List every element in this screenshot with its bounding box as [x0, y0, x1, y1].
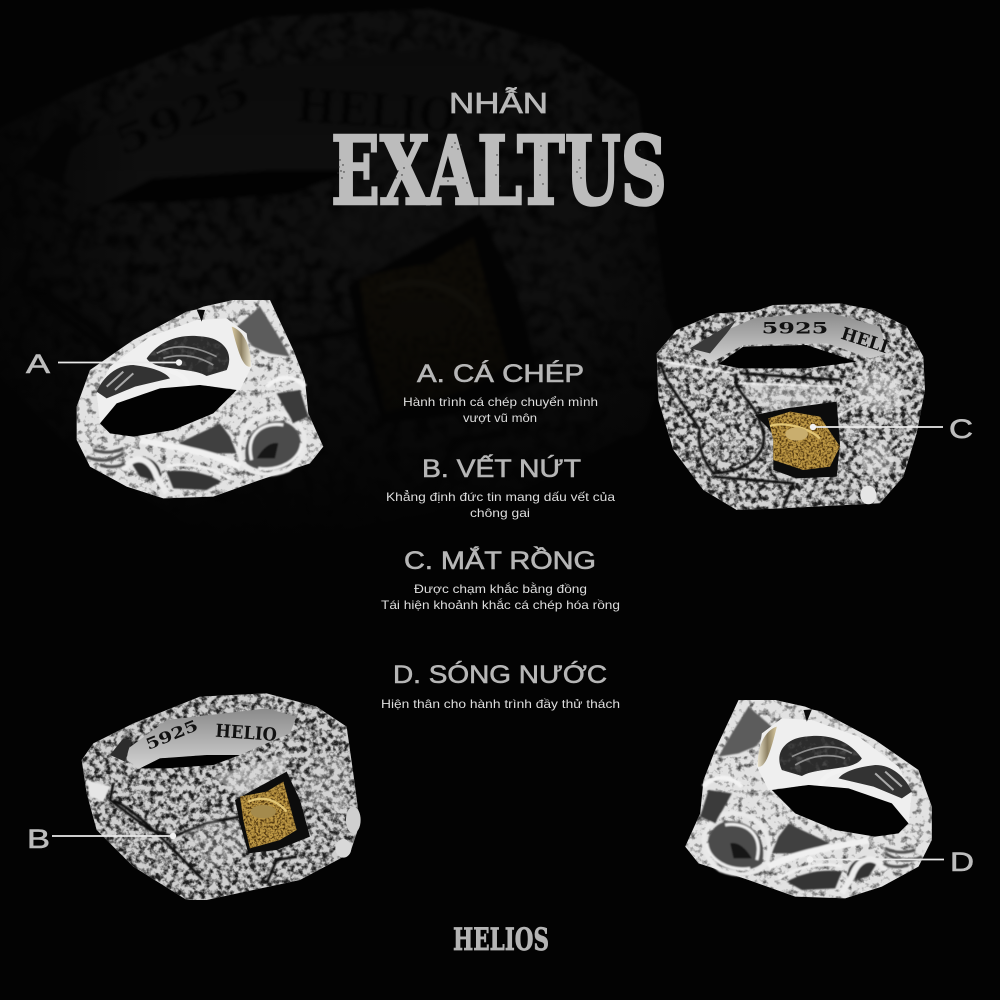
ring C body [657, 303, 925, 510]
ring A scrolls [87, 378, 308, 493]
ring C gold eye [768, 412, 840, 470]
ring B cracks and plates [87, 750, 347, 883]
section C text: Được chạm khắc bằng đồng [414, 583, 587, 596]
callout A [26, 349, 182, 379]
section D text [381, 660, 620, 711]
section B text: Khẳng định đức tin mang dấu vết của [386, 491, 616, 504]
ring D photo [685, 700, 932, 898]
ring C photo [657, 303, 925, 510]
ring C cavity [755, 402, 840, 478]
section A text: Hành trình cá chép chuyển mình [403, 396, 598, 409]
section C text: C. MẮT RỒNG [404, 545, 596, 575]
ring A photo [77, 300, 323, 498]
section B text: chông gai [470, 507, 530, 520]
ring B cavity [235, 772, 310, 853]
ring B inner surface [127, 708, 297, 768]
ring C cracks and plates [660, 362, 903, 507]
ring A fish relief [147, 336, 229, 376]
ring B photo [82, 693, 361, 900]
callout C [810, 414, 973, 444]
callout C: C [949, 414, 973, 444]
ghost enlarged ring background [0, 0, 720, 738]
section A text: vượt vũ môn [463, 412, 537, 425]
section D text: D. SÓNG NƯỚC [393, 660, 607, 689]
ring A gold reflection [232, 327, 251, 367]
callout B: B [27, 824, 50, 854]
ring A body [77, 300, 323, 498]
ring A hole [100, 385, 237, 437]
section D text: Hiện thân cho hành trình đầy thử thách [381, 698, 620, 711]
callout D [807, 847, 974, 877]
ring A inner surface [97, 318, 252, 423]
callout A: A [26, 349, 50, 379]
ring B body [82, 693, 360, 900]
ring C hole [718, 345, 857, 368]
title: NHẪN: NHẪN [449, 86, 548, 120]
section A text: A. CÁ CHÉP [417, 359, 584, 388]
title: EXALTUS: EXALTUS [331, 116, 667, 227]
ring C hallmark text: 5925 [762, 318, 828, 337]
callout B [27, 824, 176, 854]
ring C photo: HELI [838, 324, 891, 358]
ring B hallmark text: 5925 [143, 716, 201, 754]
section B text [386, 454, 616, 520]
ring A face shading [237, 307, 290, 357]
ring B photo: HELIO [215, 721, 278, 746]
section C text [381, 545, 620, 612]
section B text: B. VẾT NỨT [422, 454, 581, 483]
section A text [403, 359, 598, 425]
section C text: Tái hiện khoảnh khắc cá chép hóa rồng [381, 599, 620, 612]
title: EXALTUS [331, 116, 667, 227]
ring B gold eye [240, 782, 297, 848]
callout D: D [950, 847, 974, 877]
logo: HELIOS: HELIOS [453, 922, 549, 958]
ring B hole [140, 755, 240, 768]
ring C inner surface [690, 312, 888, 363]
